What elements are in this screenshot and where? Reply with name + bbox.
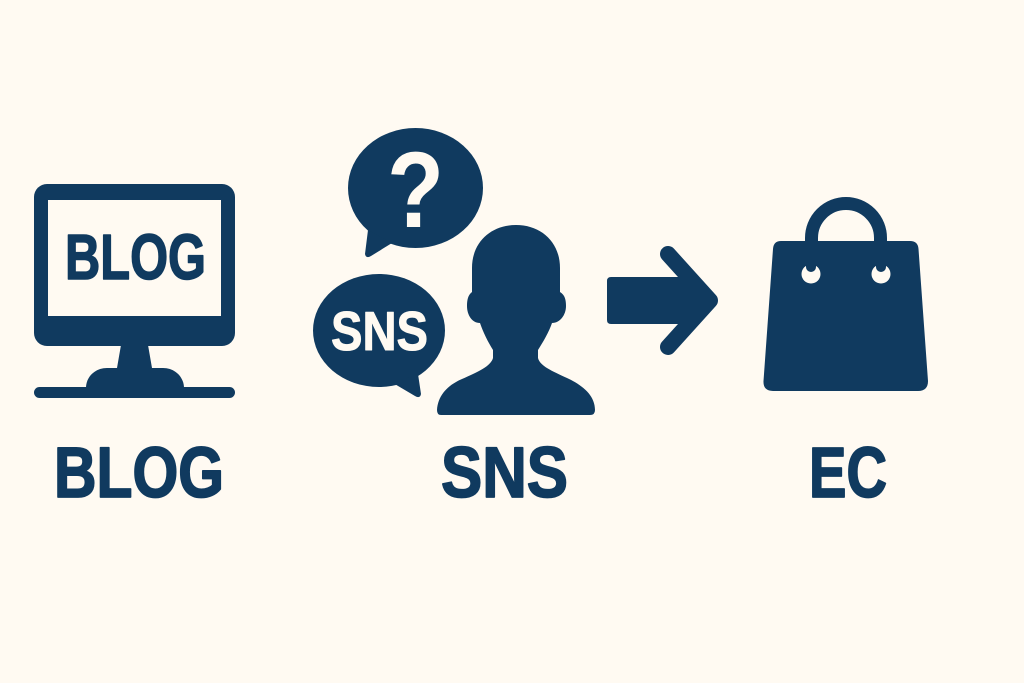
arrow: [607, 254, 710, 347]
icon: SNS speech bubble: [313, 274, 445, 397]
question mark: ?: [387, 129, 444, 250]
label: EC: EC: [809, 434, 887, 513]
icon: desktop monitor: [34, 184, 235, 398]
label: BLOG: BLOG: [54, 434, 224, 513]
panel: ec: [763, 204, 928, 513]
panel: sns: [313, 128, 595, 513]
label: SNS: SNS: [441, 434, 568, 513]
monitor screen text: BLOG: [65, 221, 206, 293]
icon: person silhouette: [437, 225, 595, 415]
bubble text: SNS: [331, 300, 428, 362]
icon: shopping bag: [763, 204, 928, 391]
icon: question speech bubble: [348, 128, 483, 257]
panel: blog: [34, 184, 235, 513]
